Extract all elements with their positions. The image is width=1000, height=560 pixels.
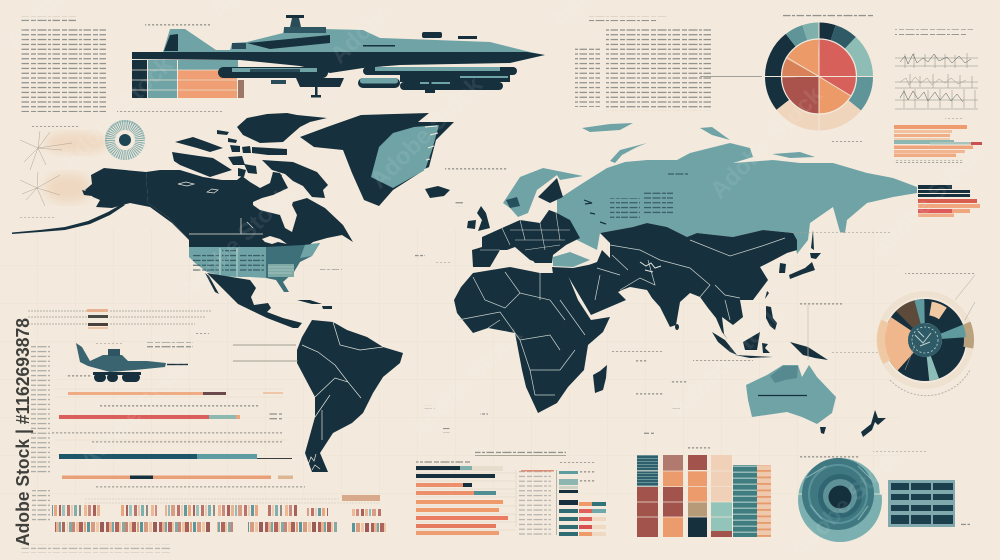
watermark: diagonal repeated text: Adobe Stock [75,351,198,474]
radial chart: teal rings [798,451,928,542]
region: British Isles [467,206,490,231]
illustration: warship with stacked data block [132,15,545,98]
top-left ruled lines with swatches [28,309,212,334]
bar chart: dark and red bars [918,185,980,217]
illustration: armored vehicle [66,342,298,382]
region: New Zealand [861,410,886,437]
watermark: diagonal repeated text: Adobe Stock [865,141,988,264]
region: South America [297,320,403,472]
region: Arctic islands [172,113,328,198]
region: Greenland [300,113,454,206]
bar chart: vertical bars [20,495,387,553]
region: Mexico and Central America [205,273,332,328]
region: Asia and Arabia [568,223,797,340]
radial motif: hatched circle with radar lines [20,121,144,219]
bar chart: long horizontal bars [52,389,305,488]
pie chart with outer ring [765,14,873,131]
caption: under ship [117,110,222,112]
heading: above ship [145,23,210,26]
line chart: signal traces [895,53,978,109]
watermark: diagonal repeated text: Adobe Stock [405,321,528,444]
watermark: diagonal repeated text: Adobe Stock [175,181,298,304]
region: Europe [472,210,595,277]
watermark: side stock label: Adobe Stock | #1162693878 [12,318,33,546]
region: Japan and Pacific Asia [675,230,828,360]
region: Australia [746,365,836,434]
map labels [320,140,975,435]
text block: centre top [575,16,762,111]
watermark: diagonal repeated text: Adobe Stock [665,301,788,424]
radial chart: segmented wheel [879,275,975,396]
text block: top left [20,16,106,112]
bar chart: bottom centre horizontal bars [416,451,566,535]
region: Iceland [425,186,450,198]
heatmap: colored column grid [637,447,771,537]
bar chart: top right orange bars [894,118,982,163]
region: Madagascar [593,365,607,393]
region: Russia [557,123,917,254]
bar chart: side striped bars [556,461,606,536]
table grid: dark cells [888,480,970,527]
map: world [12,113,975,472]
region: Canada [146,170,353,253]
watermark: diagonal repeated text: Adobe Stock [705,81,828,204]
region: Scandinavia [503,168,583,217]
label block on Russia [584,171,688,224]
left column: label lines [30,345,50,522]
watermark: diagonal repeated text: Adobe Stock [55,51,178,174]
region: Africa [454,267,610,413]
region: United States [189,243,320,292]
text block: top right [895,26,973,35]
watermark: diagonal repeated text: Adobe Stock [365,71,488,194]
region: Alaska and Aleutians [12,168,189,240]
